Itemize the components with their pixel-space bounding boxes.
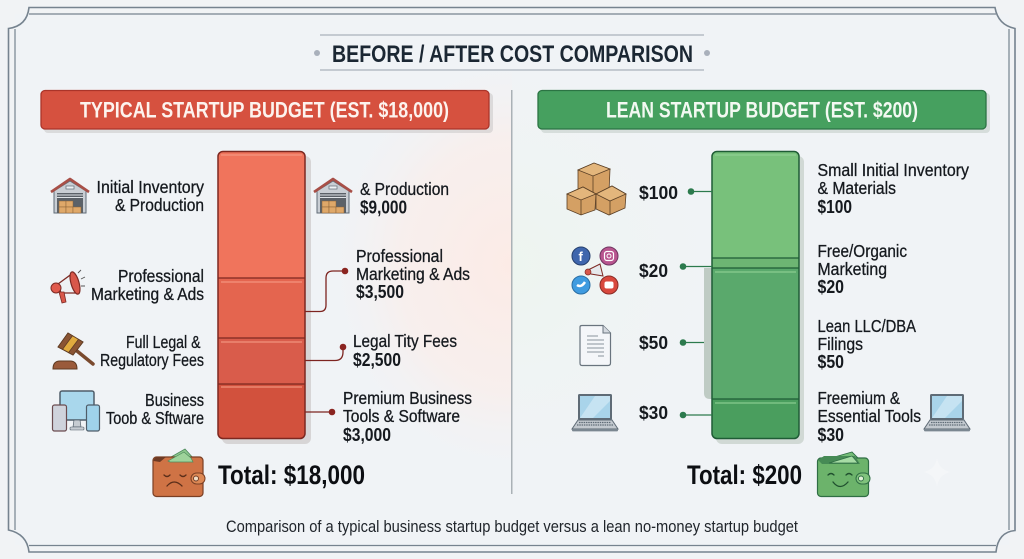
right labels: lean budget: & Materials: [818, 178, 896, 198]
right labels: lean budget: $30: [818, 424, 844, 445]
left labels: typical budget categories: Professional: [118, 266, 204, 286]
icon: document: [580, 326, 610, 366]
right labels: typical budget amounts: Professional: [356, 246, 443, 266]
right labels: lean budget: $50: [818, 351, 844, 372]
right labels: typical budget amounts: [343, 179, 472, 445]
right labels: lean budget: $20: [818, 276, 844, 297]
left labels: typical budget categories: [91, 177, 204, 428]
right labels: lean budget: Freemium &: [818, 388, 900, 408]
right labels: typical budget amounts: $9,000: [360, 196, 407, 218]
right labels: typical budget amounts: $3,000: [343, 424, 391, 445]
total: lean budget: Total: $200: [687, 460, 802, 490]
title: [314, 35, 710, 70]
icon: laptop left: [572, 394, 618, 431]
icon: sad wallet: [153, 449, 205, 496]
icon: cardboard boxes: [567, 163, 626, 215]
left amounts: lean budget: $50: [639, 332, 668, 353]
right labels: lean budget: Small Initial Inventory: [818, 160, 969, 180]
stacked bar: typical budget: [218, 152, 311, 444]
left panel pink tint: [15, 14, 512, 545]
center divider: [511, 90, 512, 494]
right labels: typical budget amounts: $2,500: [353, 349, 401, 370]
left labels: typical budget categories: & Production: [115, 195, 204, 215]
panel: typical startup budget header: TYPICAL STARTUP BUDGET (EST. $18,000): [80, 98, 449, 122]
right labels: typical budget amounts: Marketing & Ads: [356, 264, 470, 284]
icon: warehouse left: [51, 179, 89, 213]
left labels: typical budget categories: Business: [145, 390, 204, 410]
left amounts: lean budget: $30: [639, 402, 668, 423]
icon: gavel: [53, 333, 93, 369]
connectors: lean budget: [680, 188, 712, 418]
connectors: typical budget: [305, 268, 348, 415]
left labels: typical budget categories: Marketing & Ads: [91, 284, 204, 304]
right panel green tint: [512, 14, 1009, 545]
left labels: typical budget categories: Regulatory Fees: [100, 350, 204, 370]
stacked bar: lean budget: [704, 152, 804, 444]
icon: devices: [52, 391, 100, 431]
right labels: lean budget: Free/Organic: [818, 241, 907, 261]
title: BEFORE / AFTER COST COMPARISON: [332, 41, 693, 68]
left labels: typical budget categories: Full Legal &: [126, 332, 201, 352]
left amounts: lean budget: [639, 182, 678, 423]
right labels: typical budget amounts: & Production: [360, 179, 449, 199]
icon: laptop right: [924, 394, 970, 431]
icon: megaphone: [51, 270, 85, 303]
right labels: lean budget: $100: [818, 196, 852, 217]
left amounts: lean budget: $100: [639, 182, 678, 203]
total: typical budget: Total: $18,000: [218, 460, 365, 490]
panel: lean startup budget header: LEAN STARTUP BUDGET (EST. $200): [606, 98, 918, 122]
decorative sparkle: [923, 458, 951, 487]
right labels: lean budget: Lean LLC/DBA: [818, 316, 916, 336]
left labels: typical budget categories: Initial Inventory: [96, 177, 204, 197]
right labels: lean budget: Essential Tools: [818, 406, 921, 426]
icon: social media cluster: f: [578, 249, 584, 264]
left labels: typical budget categories: Toob & Sftware: [106, 408, 204, 428]
panel: lean startup budget header: [538, 90, 990, 133]
left amounts: lean budget: $20: [639, 260, 668, 281]
right labels: typical budget amounts: Premium Business: [343, 388, 472, 408]
icon: happy wallet: [818, 452, 870, 496]
right labels: typical budget amounts: $3,500: [356, 281, 404, 302]
caption: Comparison of a typical business startup budget versus a lean no-money startup budget: [226, 517, 798, 536]
right labels: lean budget: [818, 160, 969, 445]
right labels: lean budget: Filings: [818, 334, 863, 354]
right labels: typical budget amounts: Legal Tity Fees: [353, 331, 457, 351]
right labels: lean budget: Marketing: [818, 259, 887, 279]
panel: typical startup budget header: [41, 90, 493, 133]
icon: social media cluster: [572, 247, 618, 294]
icon: warehouse right: [314, 179, 352, 213]
right labels: typical budget amounts: Tools & Software: [343, 406, 460, 426]
